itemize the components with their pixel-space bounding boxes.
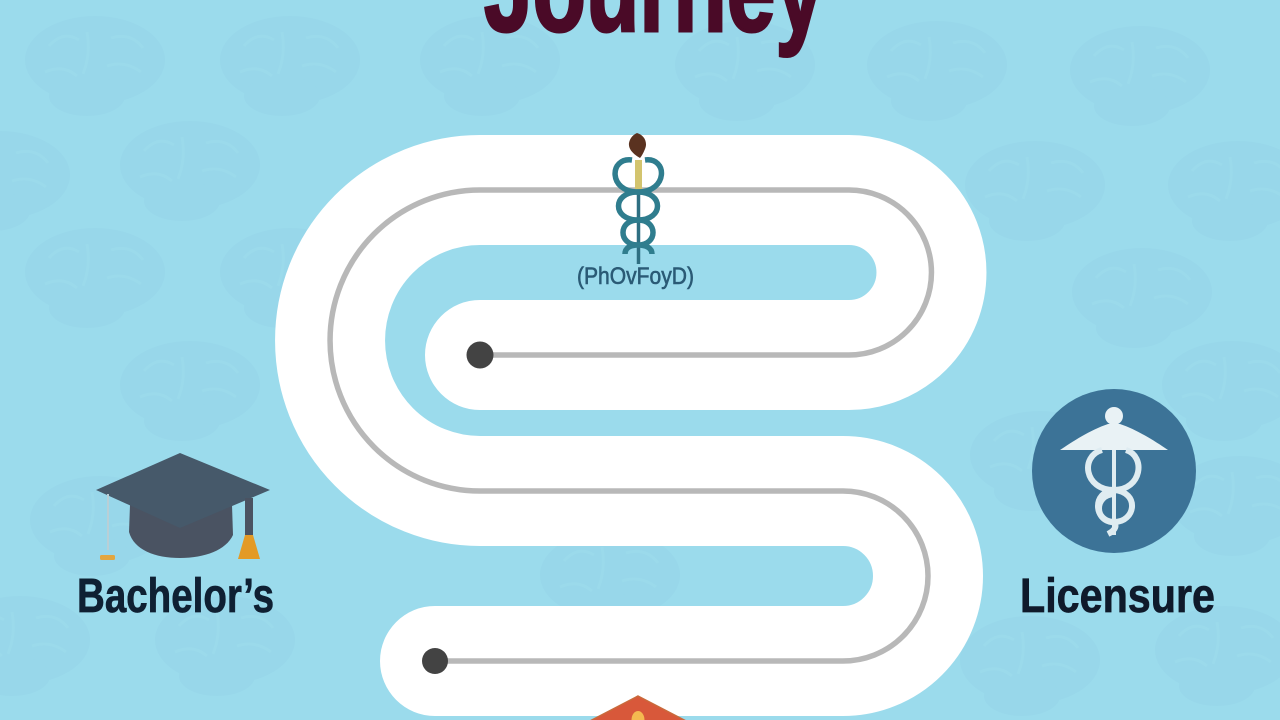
staff knob xyxy=(629,133,646,158)
upper path end dot xyxy=(466,342,494,368)
left tassel xyxy=(107,494,109,550)
cap base xyxy=(129,505,233,558)
roof xyxy=(588,696,688,720)
doctorate label: (PhOvFoyD) xyxy=(577,263,694,290)
right tassel xyxy=(245,498,253,536)
label: Bachelor's: Bachelor’s xyxy=(77,570,274,623)
road surface xyxy=(330,190,931,661)
staff xyxy=(1112,420,1116,535)
staff ball xyxy=(1105,407,1123,425)
icon: graduation cap xyxy=(96,453,270,560)
snake xyxy=(1088,450,1138,534)
snakes xyxy=(615,160,661,254)
icon: doctorate caduceus xyxy=(615,133,661,264)
icon: licensure caduceus badge xyxy=(1032,389,1196,553)
road centre line xyxy=(330,190,931,661)
mortarboard xyxy=(96,453,270,528)
icon: institution building roof xyxy=(588,696,688,720)
winding road xyxy=(330,190,931,674)
badge circle xyxy=(1032,389,1196,553)
roof window xyxy=(632,711,644,720)
staff xyxy=(637,190,640,264)
label: Licensure: Licensure xyxy=(1020,570,1215,623)
wings xyxy=(1060,424,1168,450)
lower path end dot xyxy=(422,648,448,674)
